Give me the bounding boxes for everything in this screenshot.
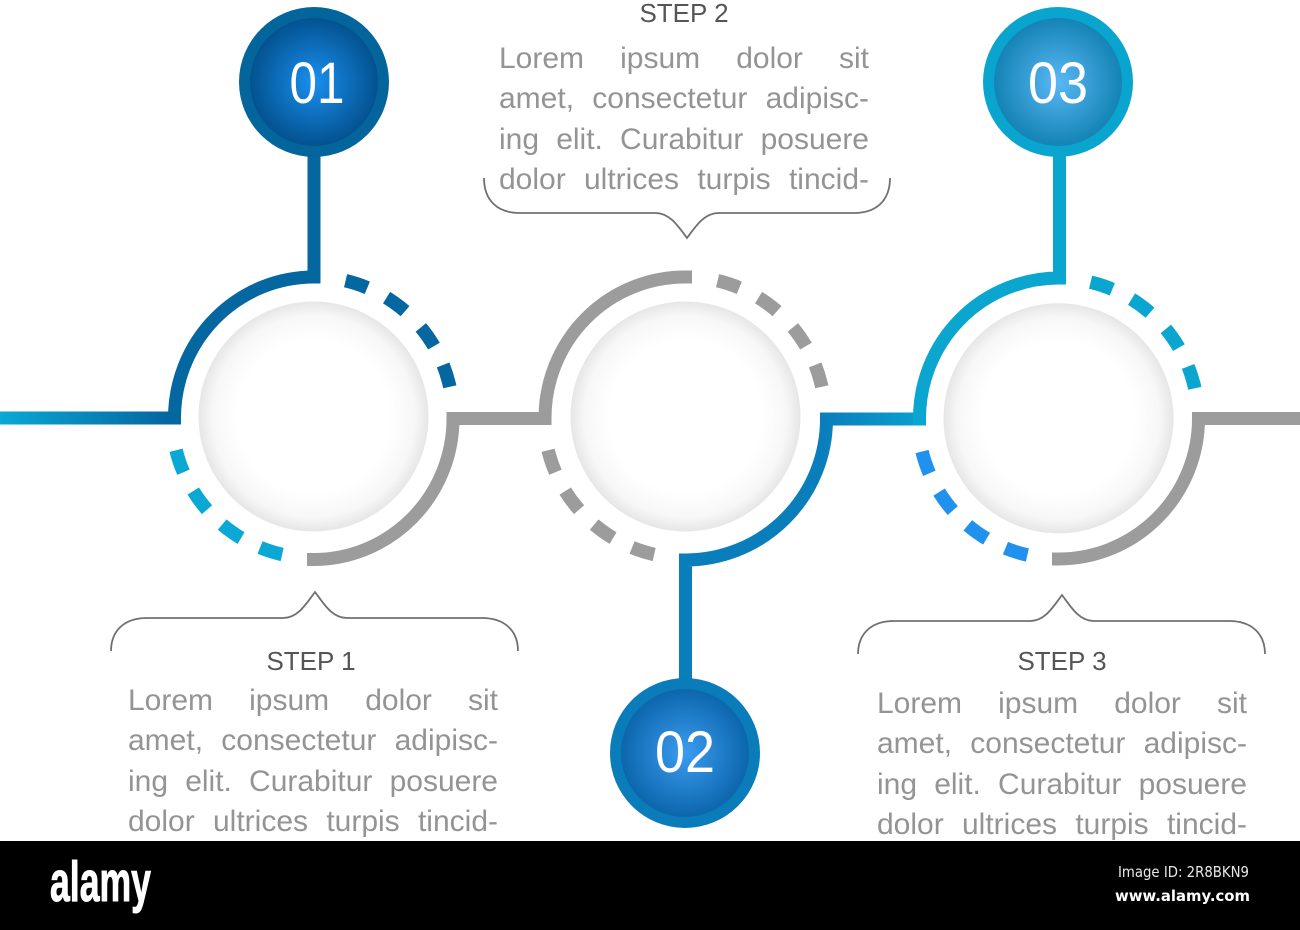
website: www.alamy.com (1115, 887, 1250, 905)
footer logo: alamy (50, 850, 151, 914)
connector: step 1 grey arc (307, 277, 692, 560)
heading: step 1: STEP 1 (266, 646, 356, 676)
badge 03: 03 (1028, 51, 1088, 116)
connector: step 3 cyan arc (913, 150, 1060, 419)
connector: step 3 grey arc (1052, 418, 1300, 559)
step 2 node (516, 247, 920, 690)
step 1 node (0, 150, 692, 586)
step 3 node (890, 150, 1300, 586)
connector: step 2 blue arc (686, 419, 920, 690)
text block: step 2: ing elit. Curabitur posuere (499, 123, 869, 156)
text block: step 3: Lorem ipsum dolor sit (877, 687, 1247, 720)
text block: step 1: amet, consectetur adipisc- (128, 724, 498, 757)
badge 01 (239, 7, 389, 157)
text block: step 3 (877, 687, 1247, 841)
dashes: step 1 upper right (146, 249, 481, 584)
text block: step 3: ing elit. Curabitur posuere (877, 768, 1247, 801)
brace: step 2 (484, 178, 890, 238)
text block: step 3: amet, consectetur adipisc- (877, 727, 1247, 760)
dashes: step 2 upper right (518, 249, 853, 584)
dashes: step 2 lower left (516, 247, 855, 586)
brace: step 3 (858, 595, 1265, 654)
badge 02: 02 (655, 720, 715, 785)
inner disc: step 3 (944, 303, 1174, 533)
text block: step 2: Lorem ipsum dolor sit (499, 42, 869, 75)
inner disc: step 1 (198, 302, 428, 532)
text block: step 1 (128, 684, 498, 838)
footer bar (0, 841, 1300, 930)
brace: step 1 (111, 592, 518, 651)
dashes: step 1 lower left (144, 247, 483, 586)
dashes: step 3 upper right (891, 250, 1226, 586)
text block: step 3: dolor ultrices turpis tincid- (877, 808, 1247, 841)
text block: step 2: dolor ultrices turpis tincid- (499, 163, 869, 196)
text block: step 2: amet, consectetur adipisc- (499, 82, 869, 115)
text block: step 1: ing elit. Curabitur posuere (128, 765, 498, 798)
dashes: step 3 lower left (890, 250, 1227, 586)
text block: step 1: Lorem ipsum dolor sit (128, 684, 498, 717)
badge 01: 01 (290, 51, 344, 116)
heading: step 3: STEP 3 (1017, 646, 1107, 676)
badge 02 (610, 678, 760, 828)
connector: step 1 blue arc (0, 150, 314, 418)
text block: step 2 (499, 42, 869, 196)
text block: step 1: dolor ultrices turpis tincid- (128, 805, 498, 838)
badge 03 (983, 7, 1133, 157)
inner disc: step 2 (570, 302, 800, 532)
image id: Image ID: 2R8BKN9 (1118, 863, 1249, 881)
